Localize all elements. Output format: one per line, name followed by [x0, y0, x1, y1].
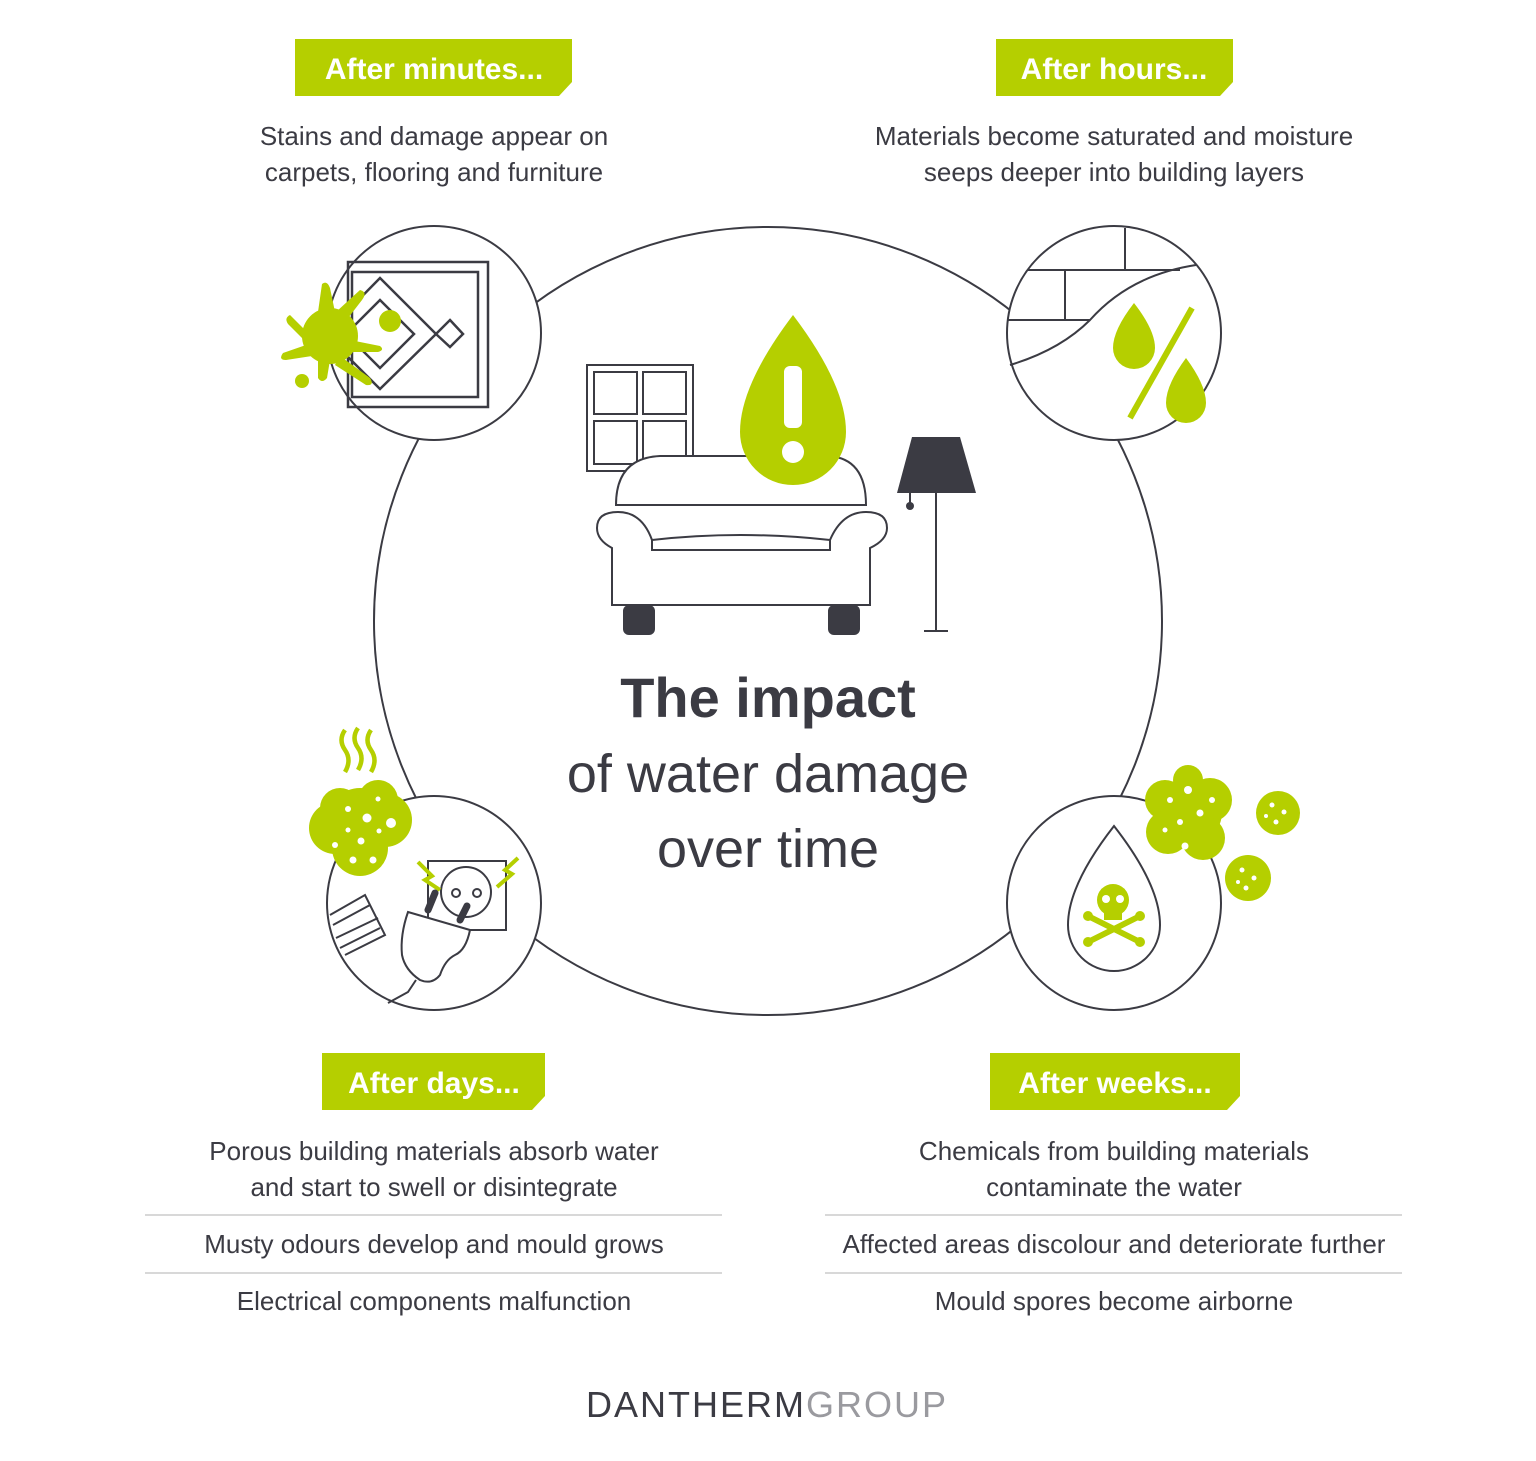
text: after days — [145, 1136, 722, 1316]
text: after minutes: Stains and damage appear on — [260, 121, 608, 151]
logo: DANTHERMGROUP — [586, 1384, 948, 1425]
title: of water damage — [567, 744, 969, 804]
heading: after hours — [996, 39, 1233, 96]
panel: after hours icon — [1007, 226, 1221, 440]
text: after weeks: contaminate the water — [986, 1172, 1242, 1202]
text: after hours: Materials become saturated and moisture — [875, 121, 1353, 151]
text: after days: Porous building materials absorb water — [209, 1136, 659, 1166]
text: after days: and start to swell or disintegrate — [250, 1172, 618, 1202]
central illustration: living room — [587, 315, 976, 635]
text: after hours: seeps deeper into building layers — [924, 157, 1304, 187]
text: after weeks: Chemicals from building materials — [919, 1136, 1309, 1166]
main circle — [374, 227, 1162, 1015]
heading: after minutes — [295, 39, 572, 96]
text: after weeks: Affected areas discolour and deteriorate further — [843, 1229, 1386, 1259]
text: after minutes: carpets, flooring and furniture — [265, 157, 603, 187]
text: after minutes — [260, 121, 608, 187]
text: after weeks — [825, 1136, 1402, 1316]
heading: after days — [322, 1053, 545, 1110]
panel: after days icon — [309, 728, 541, 1010]
title: over time — [657, 819, 879, 879]
text: after days: Electrical components malfunction — [237, 1286, 631, 1316]
heading: after hours: After hours... — [1021, 53, 1207, 86]
panel: after weeks icon — [1007, 765, 1300, 1010]
text: after days: Musty odours develop and mould grows — [204, 1229, 664, 1259]
heading: after weeks: After weeks... — [1018, 1067, 1212, 1100]
heading: after days: After days... — [348, 1067, 520, 1100]
text: after weeks: Mould spores become airborne — [935, 1286, 1293, 1316]
text: after hours — [875, 121, 1353, 187]
heading: after weeks — [990, 1053, 1240, 1110]
heading: after minutes: After minutes... — [325, 53, 543, 86]
title: The impact — [620, 666, 916, 729]
title — [567, 666, 969, 879]
panel: after minutes icon — [281, 226, 541, 440]
